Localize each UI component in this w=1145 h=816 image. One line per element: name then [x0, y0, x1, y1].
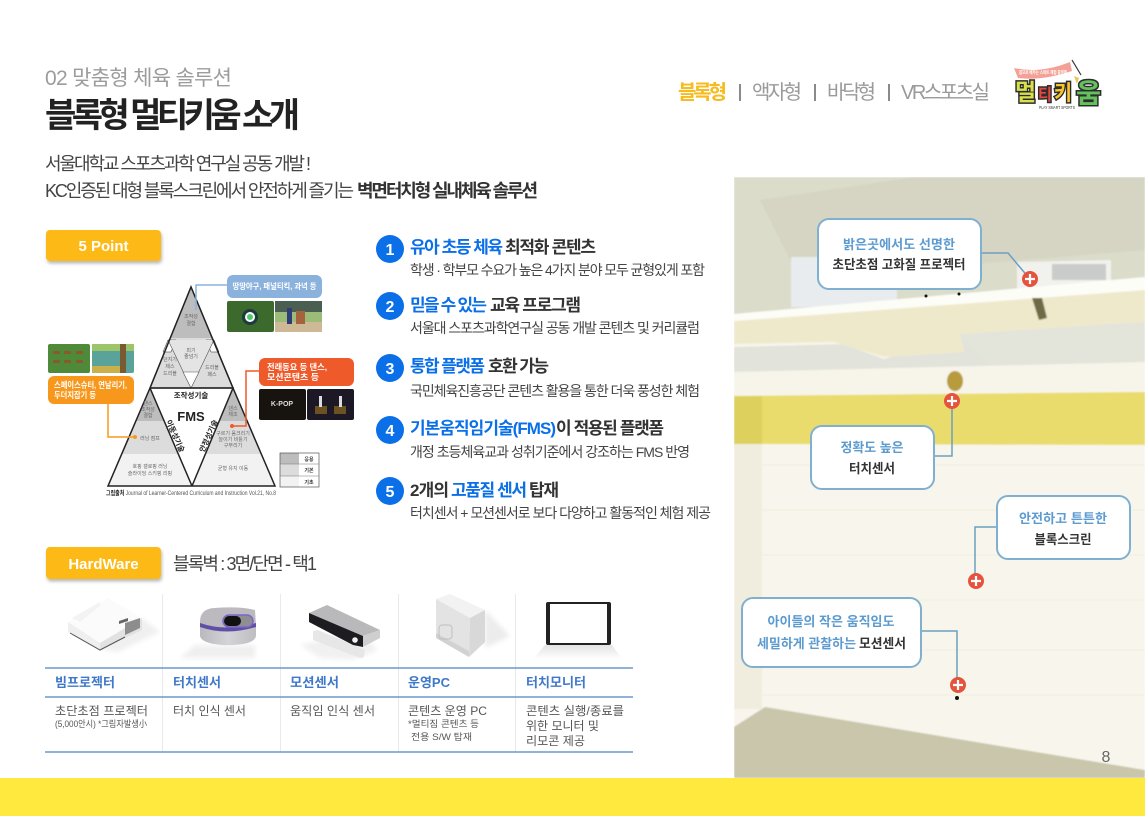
marker: block screen [968, 573, 984, 589]
top navigation: 블록형 [678, 81, 727, 104]
point 5: 터치센서 + 모션센서로 보다 다양하고 활동적인 체험 제공 [410, 505, 711, 521]
point 4: 이 적용된 플랫폼 [556, 419, 664, 438]
FMS pyramid diagram: 결합 [186, 320, 196, 327]
FMS pyramid diagram: 던지기 [163, 356, 177, 363]
logo: 움 [1076, 79, 1101, 109]
hardware table: 터치모니터 [526, 675, 586, 690]
point 2: 서울대 스포츠과학연구실 공동 개발 콘텐츠 및 커리큘럼 [410, 320, 700, 336]
point 2: 2 [386, 299, 395, 316]
callout: orange-red dance [230, 358, 354, 428]
FMS pyramid diagram: 러닝 점프 [140, 435, 160, 442]
point 1: 유아 초등 체육 [410, 238, 503, 257]
callout: blue sports: 땅땅야구, 패널티킥, 과녁 등 [232, 281, 317, 291]
hardware table: 터치 인식 센서 [173, 704, 246, 718]
callout: touch sensor [811, 401, 952, 489]
point 1: 학생 · 학부모 수요가 높은 4가지 분야 모두 균형있게 포함 [410, 262, 705, 278]
logo: PLAY SMART SPORTS [1039, 105, 1075, 110]
hardware table: 전용 S/W 탑재 [411, 731, 472, 742]
callout: block screen: 블록스크린 [1034, 532, 1092, 547]
logo [1014, 60, 1101, 110]
hardware table: 운영PC [408, 675, 451, 690]
right triangle [192, 388, 275, 486]
pyramid legend [280, 453, 319, 487]
point 3: 3 [386, 361, 395, 378]
icon: touch sensor [180, 607, 256, 658]
hardware table: 콘텐츠 운영 PC [408, 704, 487, 718]
photo: gymnasium wall [734, 177, 1145, 778]
left triangle [108, 388, 192, 486]
point 5: 고품질 센서 [451, 481, 527, 500]
intro text: 벽면터치형 실내체육 솔루션 [357, 181, 538, 201]
FMS pyramid diagram: 결합 [143, 412, 153, 419]
FMS pyramid diagram: 조작성기술 [174, 390, 208, 400]
logo: 몸으로 배우는 스마트 체험 플랫폼 [1019, 69, 1067, 76]
hardware note: 블록벽 : 3면/단면 - 택1 [173, 554, 317, 574]
callout: motion sensor: 세밀하게 관찰하는 [757, 636, 856, 651]
hardware table: 빔프로젝터 [55, 675, 115, 690]
callout: orange games: 스페이스슈터, 연날리기, [54, 380, 127, 390]
callout: orange-red dance: K-POP [271, 401, 293, 408]
hardware table: (5,000안시) *그림자발생小 [55, 718, 147, 729]
hardware table: 모션센서 [290, 675, 339, 690]
point 3 [376, 354, 700, 399]
FMS pyramid diagram: 드리블 [205, 364, 219, 371]
top navigation: 액자형 [752, 81, 802, 104]
FMS pyramid diagram: 댄스 [228, 405, 238, 412]
FMS pyramid diagram: 줄넘기 [184, 353, 198, 360]
marker: touch sensor [944, 393, 960, 409]
callout: orange-red dance: 전래동요 등 댄스, [267, 362, 327, 372]
FMS pyramid diagram: 피기 [186, 347, 196, 354]
FMS pyramid diagram: 드리블 [163, 370, 177, 377]
point 2 [376, 292, 700, 336]
intro text [45, 154, 538, 201]
badge: 5 Point: 5 Point [78, 238, 129, 255]
FMS pyramid diagram: 안정성기술 [197, 418, 220, 454]
FMS pyramid diagram: 체조 [228, 411, 238, 418]
point 5: 탑재 [529, 481, 559, 500]
FMS pyramid diagram: 호핑 갤로핑 러닝 [133, 463, 167, 470]
FMS pyramid diagram: 슬라이딩 스키핑 리핑 [128, 470, 172, 477]
point 2: 교육 프로그램 [490, 296, 581, 315]
callout: motion sensor [742, 598, 957, 680]
hardware table: *멀티짐 콘텐츠 등 [408, 718, 479, 729]
hardware table [45, 594, 633, 752]
FMS pyramid diagram: 구부리기 [224, 442, 242, 449]
FMS pyramid diagram: 늘이기 비틀기 [218, 436, 248, 443]
badge: HardWare: HardWare [68, 556, 139, 573]
point 5 [376, 477, 711, 521]
FMS pyramid diagram: 제스 [165, 363, 175, 370]
FMS pyramid diagram: 균형 유지 이동 [218, 465, 249, 472]
logo: 키 [1054, 82, 1072, 105]
FMS pyramid diagram: 댄스 [143, 400, 153, 407]
point 4: 개정 초등체육교과 성취기준에서 강조하는 FMS 반영 [410, 444, 690, 460]
top navigation: 바닥형 [827, 81, 876, 104]
callout: motion sensor: 아이들의 작은 움직임도 [768, 614, 895, 629]
point 4: 4 [386, 423, 395, 440]
point 1: 1 [386, 242, 395, 259]
callout: orange games [48, 344, 137, 439]
footer band [0, 778, 1145, 816]
FMS pyramid diagram: 조작성 [184, 313, 198, 320]
badge: 5 Point [46, 230, 161, 261]
hardware table: 터치센서 [173, 675, 221, 690]
intro text: KC인증된 대형 블록스크린에서 안전하게 즐기는 [45, 181, 354, 201]
hardware table: 움직임 인식 센서 [290, 704, 375, 718]
hardware table: 위한 모니터 및 [526, 719, 599, 733]
marker: motion sensor [950, 677, 966, 693]
callout: orange-red dance: 모션콘텐츠 등 [267, 372, 319, 382]
intro text: 서울대학교 스포츠과학 연구실 공동 개발 ! [45, 154, 311, 174]
point 2: 믿을 수 있는 [410, 296, 487, 315]
logo: 멀 [1015, 79, 1036, 105]
point 1: 최적화 콘텐츠 [505, 238, 596, 257]
callout: block screen [975, 496, 1130, 578]
callout: projector: 밝은곳에서도 선명한 [843, 237, 955, 252]
badge: HardWare [46, 547, 161, 579]
FMS pyramid diagram: 이동성기술 [164, 418, 187, 454]
callout: block screen: 안전하고 튼튼한 [1019, 511, 1107, 526]
top navigation [678, 81, 990, 104]
point 3: 통합 플랫폼 [410, 357, 485, 376]
point 4 [376, 416, 690, 460]
pyramid source: 그림출처 Journal of Learner-Centered Curriculum and Instruction Vol.21, No.8 [106, 488, 276, 497]
point 1 [376, 235, 705, 278]
icon: operating PC [436, 594, 510, 657]
callout: orange games: 두더지잡기 등 [54, 390, 96, 400]
FMS pyramid diagram: 조작성 [141, 406, 155, 413]
callout: touch sensor: 터치센서 [849, 461, 895, 476]
marker: projector [1022, 271, 1038, 287]
FMS pyramid diagram [108, 287, 275, 486]
icon: projector [68, 598, 160, 652]
point 3: 호환 가능 [488, 357, 549, 376]
point 5: 2개의 [410, 481, 449, 500]
pyramid legend: 응용 [304, 456, 314, 463]
FMS pyramid diagram: FMS [177, 409, 205, 424]
callout: projector: 초단초점 고화질 프로젝터 [832, 257, 966, 272]
section label: 02 맞춤형 체육 솔루션 [45, 67, 232, 90]
pyramid legend: 기본 [304, 467, 314, 474]
pyramid legend: 기초 [304, 479, 314, 486]
point 4: 기본움직임기술(FMS) [410, 419, 556, 438]
point 5: 5 [386, 484, 395, 501]
top triangle [150, 287, 233, 388]
point 3: 국민체육진흥공단 콘텐츠 활용을 통한 더욱 풍성한 체험 [410, 383, 700, 399]
FMS pyramid diagram: 구르기 움크리기 [216, 430, 250, 437]
callout: motion sensor: 모션센서 [859, 636, 906, 651]
callout: blue sports [196, 275, 322, 332]
callout: projector [818, 219, 1029, 289]
icon: motion sensor [300, 605, 380, 660]
hardware table: 초단초점 프로젝터 [55, 704, 148, 718]
page number: 8 [1102, 749, 1111, 766]
FMS pyramid diagram: 패스 [207, 371, 217, 378]
title: 블록형 멀티키움 소개 [45, 97, 300, 135]
logo: 티 [1038, 86, 1052, 104]
hardware table: 리모콘 제공 [526, 734, 585, 748]
callout: touch sensor: 정확도 높은 [840, 440, 904, 455]
top navigation: VR스포츠실 [901, 81, 990, 104]
icon: touch monitor [533, 602, 622, 659]
hardware table: 콘텐츠 실행/종료를 [526, 703, 624, 718]
